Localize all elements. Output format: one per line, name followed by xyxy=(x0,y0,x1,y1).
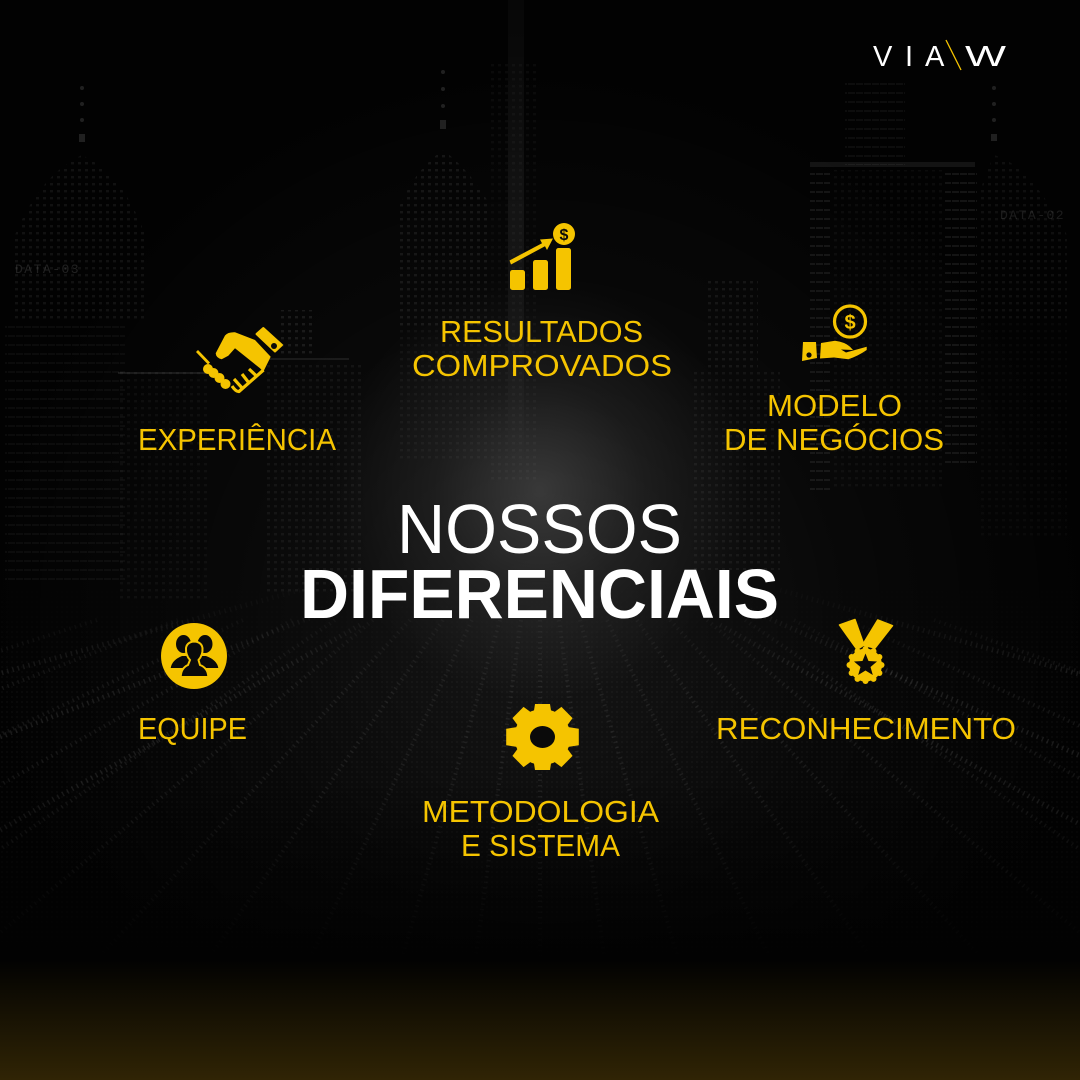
label: COMPROVADOS xyxy=(412,348,672,383)
label xyxy=(724,388,944,457)
label: DE NEGÓCIOS xyxy=(724,422,944,457)
label: RECONHECIMENTO xyxy=(716,711,1016,746)
title xyxy=(300,490,779,633)
icon: gear xyxy=(506,704,579,770)
label: EQUIPE xyxy=(138,711,247,746)
icon: hand holding coin xyxy=(802,306,867,361)
item: reconhecimento xyxy=(716,620,1016,746)
logo: VIA\W xyxy=(873,40,1007,73)
icon: hand holding coin: $ xyxy=(844,312,856,334)
item: experiência xyxy=(138,328,336,457)
title: DIFERENCIAIS xyxy=(300,555,779,633)
icon: rising bars with coin: $ xyxy=(560,227,569,244)
logo: VIA\W: W xyxy=(965,41,1007,73)
item: resultados comprovados xyxy=(412,223,672,383)
label xyxy=(412,314,672,383)
label: E SISTEMA xyxy=(461,828,620,863)
icon: team in circle xyxy=(161,623,227,689)
item: equipe xyxy=(138,623,247,746)
item: modelo de negócios xyxy=(724,306,944,457)
item: metodologia e sistema xyxy=(422,704,659,863)
label: RESULTADOS xyxy=(440,314,643,349)
label xyxy=(422,794,659,863)
icon: rising bars with coin xyxy=(510,223,575,290)
label: MODELO xyxy=(767,388,902,423)
label: METODOLOGIA xyxy=(422,794,659,829)
icon: handshake xyxy=(196,328,282,392)
logo: VIA\W: VIA xyxy=(873,41,945,73)
background: dark city: DATA-02 xyxy=(1000,208,1065,223)
title: NOSSOS xyxy=(397,490,682,568)
background: dark city: DATA-03 xyxy=(15,262,80,277)
label: EXPERIÊNCIA xyxy=(138,422,336,457)
icon: medal xyxy=(840,620,892,684)
